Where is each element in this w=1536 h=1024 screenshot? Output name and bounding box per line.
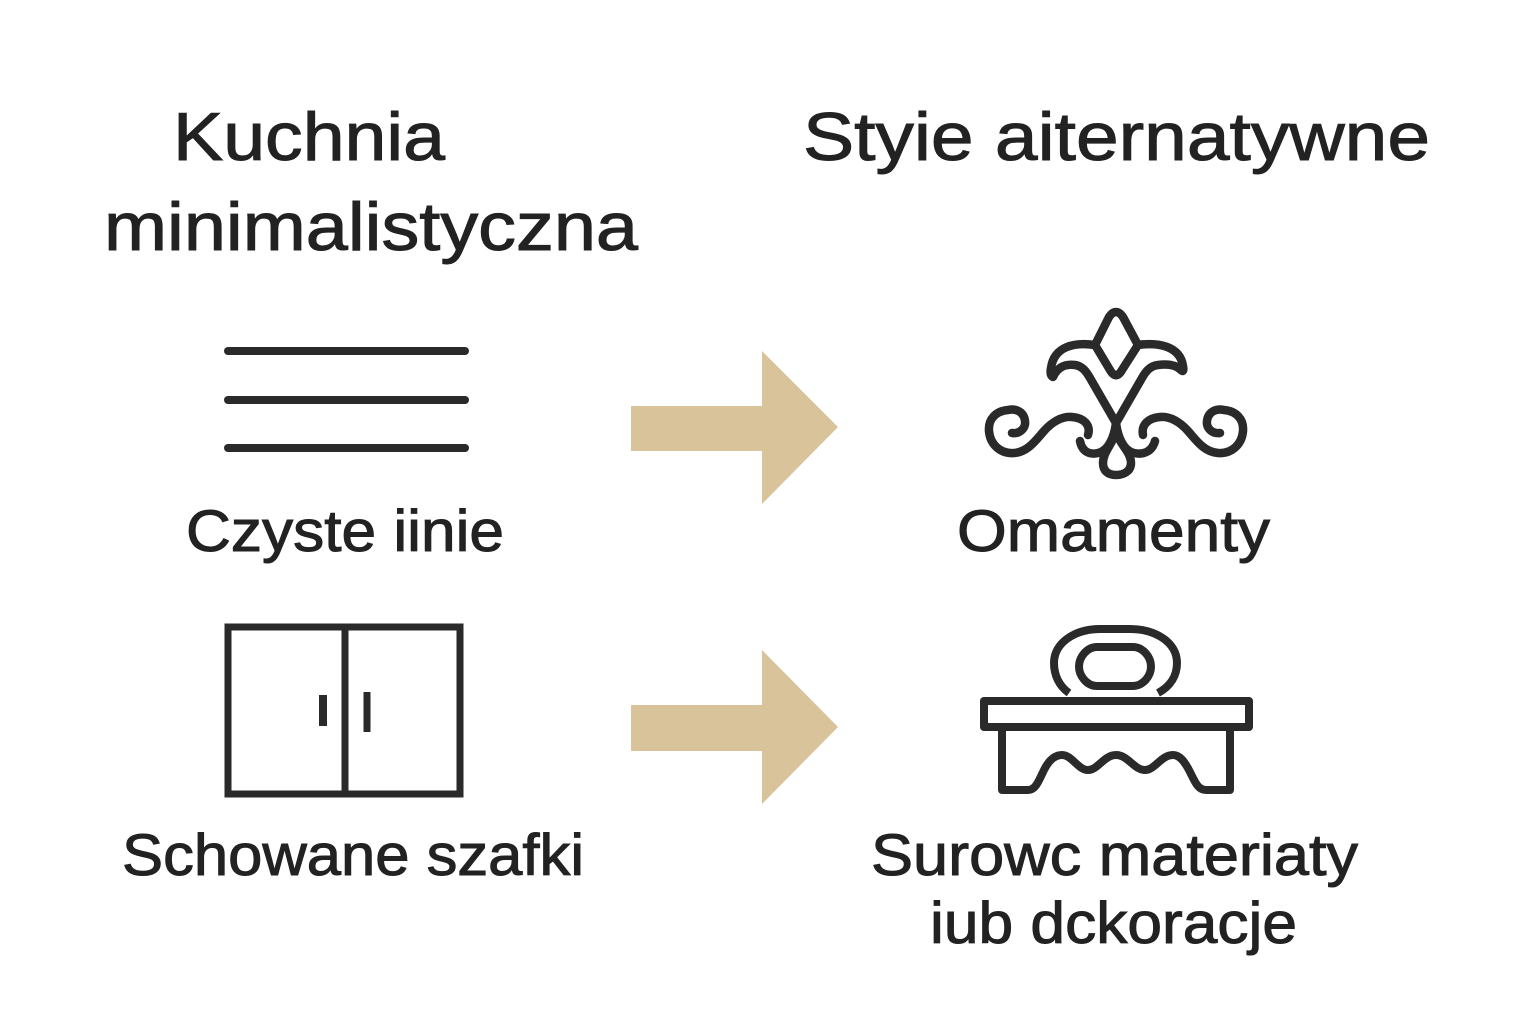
label: clean lines: Czyste iinie xyxy=(186,499,504,564)
label: ornaments: Omamenty xyxy=(957,499,1270,564)
icon: ornament xyxy=(989,312,1243,475)
label: raw materials or decorations: Surowc materiaty xyxy=(871,823,1358,888)
arrow: hidden cabinets to decorations xyxy=(631,650,838,804)
label: raw materials or decorations xyxy=(871,823,1358,956)
heading: minimalist kitchen: Kuchnia xyxy=(173,99,445,175)
heading: alternative styles: Styie aiternatywne xyxy=(803,99,1430,175)
label: hidden cabinets: Schowane szafki xyxy=(122,823,584,888)
label: raw materials or decorations: iub dckoracje xyxy=(930,891,1297,956)
heading: minimalist kitchen: minimalistyczna xyxy=(104,189,638,265)
arrow: clean lines to ornaments xyxy=(631,351,838,504)
icon: ornate console xyxy=(984,629,1249,790)
heading: minimalist kitchen xyxy=(104,99,638,265)
icon: hidden cabinets xyxy=(228,627,460,794)
icon: clean lines xyxy=(228,351,465,448)
